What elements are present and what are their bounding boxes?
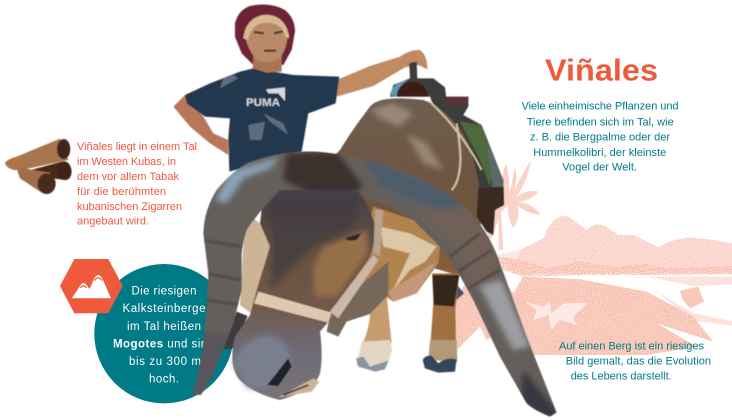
nose [233,335,290,388]
noseband [254,292,332,323]
mountains [497,216,732,273]
man's left arm [173,95,228,155]
man's right arm [337,50,427,97]
text: intro on tobacco valley: angebaut wird. [77,216,149,228]
mane [380,227,437,290]
text: plants and animals [522,101,678,174]
boat [680,287,704,308]
puma logo [246,87,285,109]
belly pink [388,262,437,302]
white leaves [525,302,588,330]
jaw [327,262,388,337]
mogotes text [113,285,214,386]
face details [254,31,283,51]
mogotes text: hoch. [149,374,179,386]
neck [253,55,282,73]
blue highlight [215,157,280,203]
text: mountain painting: Auf einen Berg ist ein riesiges [559,340,704,352]
text: intro on tobacco valley: Viñales liegt in einem Tal [77,141,197,153]
panel: mogotes circle [94,264,234,403]
text: plants and animals: z. B. die Bergpalme oder der [530,132,670,144]
mogotes text: Mogotes und sind [113,339,214,351]
hat [235,5,295,65]
nostril [267,358,292,386]
head [232,190,377,400]
text: intro on tobacco valley: dem vor allem Tabak [77,171,180,183]
far hoof [455,283,464,301]
foreground vegetation [453,277,713,355]
forehead shadow [267,197,360,290]
palm tree [487,161,541,250]
t-shirt [185,68,339,172]
dark far horn [223,312,248,349]
foreground shading [453,277,713,355]
mogotes text: im Tal heißen [127,321,201,333]
horns [180,147,563,420]
mogotes text: bis zu 300 m [129,356,201,368]
saddle ropes [430,102,482,190]
text: mountain painting: des Lebens darstellt. [571,370,672,382]
neck [350,207,440,313]
text: intro on tobacco valley: kubanischen Zigarren [77,201,182,213]
hind leg [423,273,459,373]
title: Viñales [545,53,658,88]
mountain ridges [513,216,732,272]
text: intro on tobacco valley [77,141,197,228]
river [523,274,732,327]
mogotes text: Die riesigen [132,285,196,297]
photo: man with hat [173,5,427,172]
hair band [243,15,289,40]
saddle flap [477,187,504,235]
horn tone patches [187,153,530,397]
village treeline [497,257,732,277]
photo: buffalo [180,98,563,420]
puma logo: PUMA [246,97,280,109]
text: plants and animals: Hummelkolibri, der kleinste [533,147,666,159]
text: intro on tobacco valley: für die berühmten [77,186,166,198]
forehead hair [281,151,364,192]
head [245,16,288,62]
mogotes text: Kalksteinberge [122,303,206,315]
illustration: palm and valley engraving [453,161,732,355]
eye [345,233,362,241]
front leg [356,295,392,372]
cheek tan [313,230,368,297]
photo: saddle [390,62,503,213]
text: plants and animals: Viele einheimische Pflanzen und [522,101,678,113]
body light patches [370,103,443,170]
text: plants and animals: Vogel der Welt. [562,162,637,174]
text: plants and animals: Tiere befinden sich im Tal, wie [527,116,674,128]
icon: cigars [5,139,72,194]
text: intro on tobacco valley: im Westen Kubas, in [77,156,176,168]
halter strap [330,255,378,318]
river streaks [647,277,732,326]
horn ridges [203,233,500,305]
text: mountain painting [559,340,711,382]
lip [278,378,319,397]
icon: mountain hexagon [60,259,123,313]
text: mountain painting: Bild gemalt, das die Evolution [566,355,711,367]
body [320,98,482,277]
right horn tip [520,370,558,420]
ear [240,212,277,314]
